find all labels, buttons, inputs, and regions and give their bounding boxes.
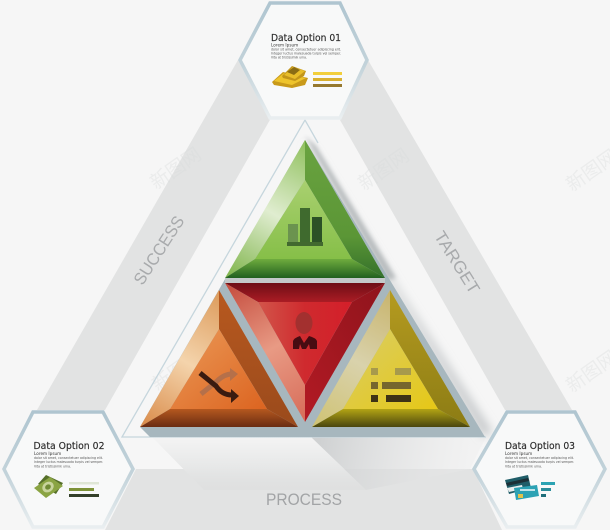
label: success: SUCCESS [130,213,188,288]
pyramid backing [140,140,485,437]
triangle: orange [140,290,298,427]
description: option 02: Lorem Ipsum [34,451,61,456]
title: option 01: Data Option 01 [271,33,341,44]
label: process: PROCESS [266,490,342,509]
watermarks [146,143,610,397]
icon: credit cards [505,475,539,500]
hexagon: option 01 [240,3,367,118]
pyramid drop shadows [152,136,492,490]
label: target: TARGET [430,228,483,297]
band: process [105,469,502,530]
description: option 02: Vita at tristissimik urna. [34,464,71,468]
band: target [340,60,572,410]
triangle: red [225,283,385,422]
icon: person [293,312,317,349]
icon: list [371,368,411,402]
description: option 03: Lorem Ipsum [505,451,532,456]
triangle: green [225,140,385,278]
legend bars: option 02 [69,482,99,497]
title: option 02: Data Option 02 [34,441,104,452]
description: option 02: dolor sit amet, consectetuer adipiscing elit. [34,456,103,460]
watermarks: 新图网 [148,345,208,396]
description: option 01: dolor sit amet, consectetuer adipiscing elit. [271,48,341,52]
description: option 03: Vita at tristissimik urna. [505,464,542,468]
title: option 03: Data Option 03 [505,441,575,452]
description: option 03 [505,451,574,468]
icon: banknotes [34,475,63,498]
hexagon: option 03 [474,412,605,527]
outline triangle [122,120,486,437]
description: option 03: Integer luctus malesuada turpis vel semper. [505,460,574,464]
watermarks: 新图网 [146,143,206,194]
legend bars: option 03 [541,482,555,497]
description: option 01 [271,42,341,60]
icon: gold bars [272,66,308,88]
description: option 02 [34,451,103,468]
description: option 01: Vita at tristissimik urna. [271,56,307,60]
icon: bar chart [287,208,323,246]
watermarks: 新图网 [354,144,414,195]
legend bars: option 01 [313,72,342,87]
description: option 02: Integer luctus malesuada turpis vel semper. [34,460,103,464]
description: option 01: Lorem Ipsum [271,42,298,48]
icon: shuffle arrows [200,368,239,403]
band: success [37,60,271,410]
description: option 03: dolor sit amet, consectetuer adipiscing elit. [505,456,574,460]
hexagon: option 02 [4,412,133,527]
triangle: yellow [312,290,470,427]
description: option 01: Integer luctus malesuada turpis vel semper. [271,52,341,56]
